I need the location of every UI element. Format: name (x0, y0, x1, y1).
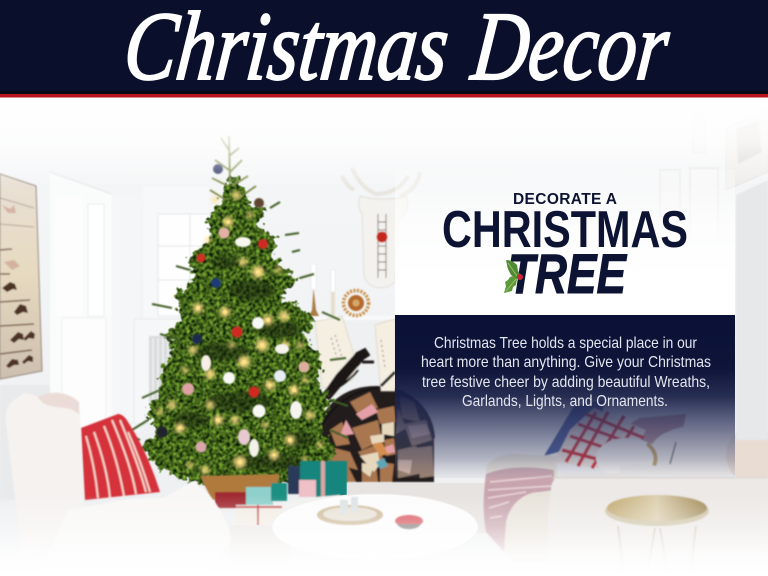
left window (0, 172, 140, 500)
right sofa (484, 400, 768, 576)
tree side branches (116, 202, 348, 440)
Christmas tree (116, 136, 348, 488)
tree top spire (210, 136, 256, 200)
blue pillow (544, 400, 604, 456)
back window (143, 187, 210, 319)
description text (421, 335, 711, 410)
gold side table (605, 495, 709, 576)
heading: tree: TREE (508, 242, 627, 305)
radiator (134, 319, 194, 424)
description text: tree festive cheer by adding beautiful Wreaths, (422, 374, 710, 391)
top fade (0, 97, 768, 187)
mantel (294, 316, 418, 394)
top right wall frames (660, 110, 768, 440)
stockings and skates (315, 316, 395, 402)
armchair (6, 393, 231, 571)
white pillows (650, 425, 754, 479)
pink pillow (618, 414, 686, 444)
tree ornaments (156, 164, 310, 457)
floor (347, 483, 487, 533)
gift boxes (200, 461, 347, 527)
heading: christmas: CHRISTMAS (442, 201, 688, 259)
candles and sunburst (309, 264, 368, 316)
pink throw (484, 467, 554, 552)
icon: holly (504, 260, 523, 293)
header band (0, 0, 768, 101)
description text: heart more than anything. Give your Christmas (421, 354, 711, 371)
sofa body (548, 474, 768, 576)
description text: Garlands, Lights, and Ornaments. (462, 393, 668, 410)
chair arm (41, 481, 231, 571)
red grid pillow (554, 408, 646, 468)
coffee table (272, 494, 478, 560)
heading: decorate a: DECORATE A (513, 191, 617, 208)
tree inner shading (172, 256, 314, 470)
deer head wall decor (342, 168, 420, 288)
description text: Christmas Tree holds a special place in our (434, 335, 698, 352)
tray and bowl (317, 497, 423, 529)
tree lights (157, 191, 323, 474)
wood pile fireplace (318, 386, 434, 482)
floor left (230, 525, 290, 565)
left wall artwork panel (0, 174, 42, 379)
red striped pillow (81, 414, 160, 500)
tree foliage (140, 178, 336, 488)
sofa left arm (486, 454, 558, 562)
panel: white heading (395, 170, 735, 315)
panel: navy description (395, 315, 735, 478)
bottom fade (0, 495, 768, 576)
